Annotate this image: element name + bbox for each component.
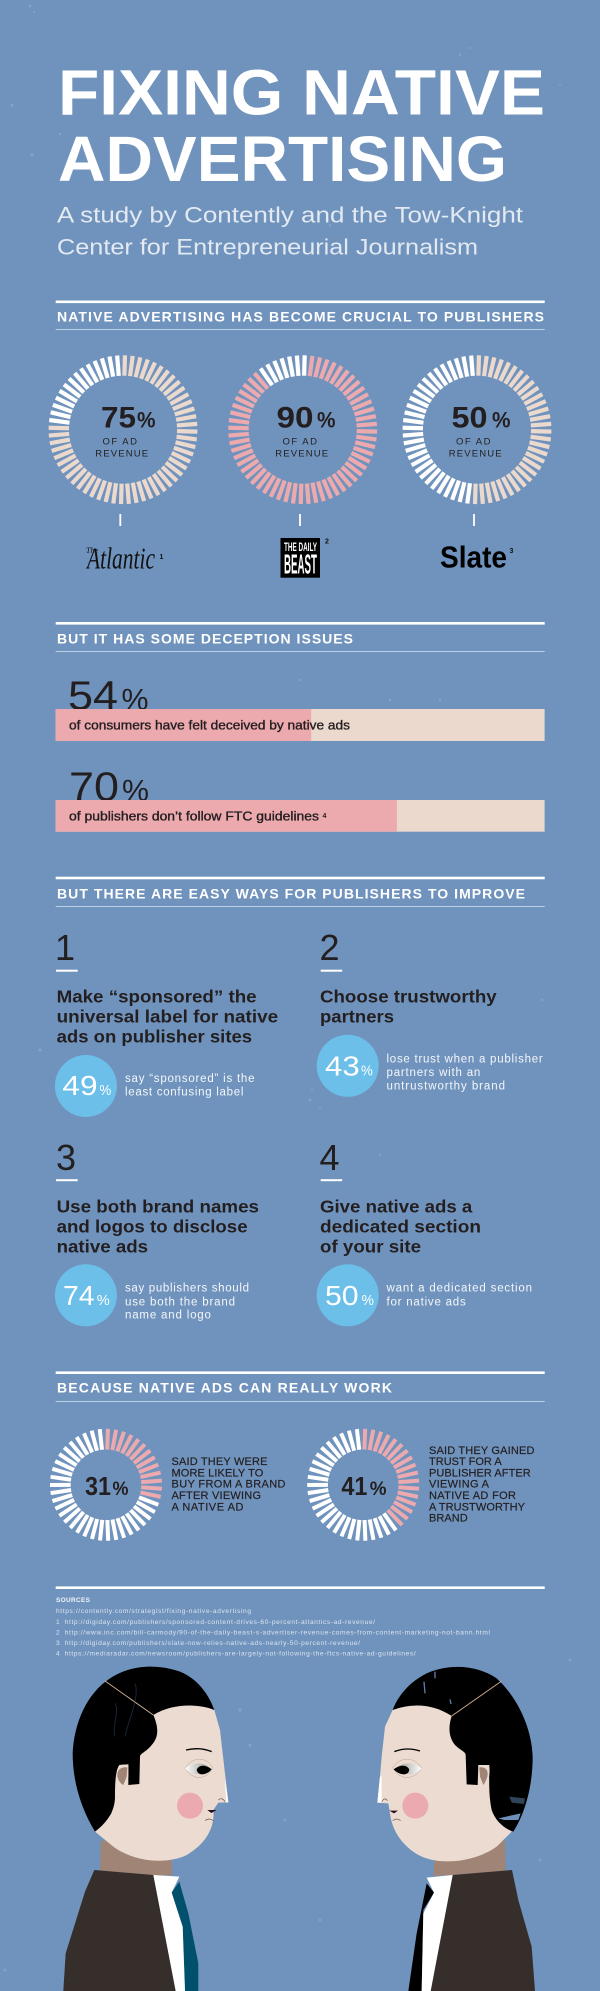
caption: 31%: BUY FROM A BRAND [172, 1479, 286, 1491]
sources: http://digiday.com/publishers/sponsored-content-drives-60-percent-atlantics-ad-revenue/ [65, 1619, 375, 1626]
panel: tip 3 brand names and logos: 3 [56, 1137, 76, 1178]
ring chart: The Atlantic 75%: OF AD [102, 437, 137, 448]
sources: 2 [56, 1629, 60, 1636]
panel: ad revenue rings: BEAST [284, 548, 317, 579]
stat circle: 49%: 49 [62, 1070, 98, 1101]
caption: 31%: MORE LIKELY TO [172, 1467, 264, 1479]
logo: The Atlantic: The [86, 546, 98, 555]
ring chart: The Daily Beast 90%: % [317, 407, 336, 432]
stat circle: 74% [55, 1264, 117, 1326]
ring chart: The Atlantic 75%: % [137, 407, 156, 432]
title: FIXING NATIVE [58, 56, 545, 128]
panel: tip 2 trustworthy partners: partners with an [386, 1067, 480, 1079]
illustration: right man [377, 1667, 535, 1991]
stat bar: 70% of publishers [56, 764, 545, 832]
heading: tip 3 [57, 1196, 259, 1256]
ring chart: The Atlantic 75%: REVENUE [95, 448, 148, 459]
caption: 41%: NATIVE AD FOR [429, 1490, 516, 1502]
stat circle: 50% [317, 1264, 379, 1326]
ring chart: The Atlantic 75% [42, 348, 204, 526]
logo: The Daily Beast: 2 [325, 538, 329, 546]
heading: tip 4: Give native ads a [320, 1196, 473, 1216]
panel: 31% more likely to buy [50, 1429, 286, 1541]
stat circle: 43%: % [361, 1063, 373, 1080]
stat bar: 54% of consumers: % [122, 684, 148, 716]
stat bar: 54% of consumers [56, 672, 545, 741]
panel: tip 2 trustworthy partners: 2 [320, 927, 340, 968]
ring chart: 41% [307, 1429, 419, 1541]
ring chart: The Daily Beast 90%: OF AD [282, 437, 317, 448]
ring chart: Slate 50%: OF AD [456, 437, 491, 448]
heading: tip 2: partners [320, 1007, 394, 1027]
stat bar: 54% of consumers: of consumers have felt deceived by native ads [69, 718, 350, 732]
sources [56, 1586, 545, 1657]
caption: 41%: BRAND [429, 1513, 468, 1525]
section heading: easy ways to improve: BUT THERE ARE EASY WAYS FOR PUBLISHERS TO IMPROVE [57, 885, 525, 901]
panel: 41% gained trust [307, 1429, 534, 1541]
sources: 4 [56, 1650, 60, 1657]
ring chart: The Daily Beast 90% [221, 348, 384, 526]
panel: tip 3 brand names and logos: name and logo [125, 1310, 211, 1322]
stat bar: 54% of consumers: 54 [68, 672, 118, 718]
sources: https://contently.com/strategist/fixing-native-advertising [56, 1608, 251, 1615]
heading: tip 4: dedicated section [320, 1216, 481, 1236]
panel: tip 3 brand names and logos: say publishers should [125, 1282, 249, 1294]
sources: SOURCES [56, 1597, 91, 1604]
panel: tip 1 sponsored label [55, 927, 278, 1117]
heading: tip 3: and logos to disclose [57, 1216, 248, 1236]
caption: 31% [172, 1456, 286, 1513]
panel: tip 3 brand names and logos [55, 1137, 259, 1326]
stat bar: 70% of publishers: 70 [69, 764, 119, 810]
stat circle: 43% [317, 1035, 379, 1097]
heading: tip 1: ads on publisher sites [57, 1027, 252, 1047]
stat circle: 43%: 43 [325, 1051, 360, 1082]
heading: tip 1: Make “sponsored” the [57, 987, 257, 1007]
stat bar: 70% of publishers: 4 [322, 813, 326, 820]
stat circle: 49% [55, 1055, 117, 1117]
logo: The Daily Beast: THE DAILY [284, 540, 317, 554]
panel: tip 1 sponsored label: say “sponsored” is the [125, 1073, 254, 1085]
logo: Slate: Slate [440, 540, 507, 575]
logo: Slate: 3 [510, 548, 514, 555]
sources: http://www.inc.com/bill-carmody/90-of-the-daily-beast-s-advertiser-revenue-comes-from-content-marketing-not-bann.html [65, 1629, 491, 1636]
subtitle: A study by Contently and the Tow-Knight [57, 203, 524, 228]
sources: https://mediaradar.com/newsroom/publishers-are-largely-not-following-the-ftcs-native-ad-guidelines/ [65, 1650, 416, 1657]
caption: 31%: AFTER VIEWING [172, 1490, 261, 1502]
sources: http://digiday.com/publishers/slate-now-relies-native-ads-nearly-50-percent-revenue/ [65, 1640, 360, 1647]
ring chart: 41%: 41 [341, 1471, 367, 1501]
heading: tip 2: Choose trustworthy [320, 987, 497, 1007]
stat circle: 49%: % [100, 1082, 111, 1099]
illustration: left man [63, 1667, 228, 1991]
ring chart: The Daily Beast 90%: 90 [276, 401, 314, 434]
ring chart: Slate 50%: REVENUE [449, 448, 502, 459]
panel: tip 4 dedicated section: want a dedicated section [386, 1282, 532, 1294]
panel: tip 2 trustworthy partners: lose trust when a publisher [386, 1053, 543, 1065]
ring chart: Slate 50%: % [492, 407, 510, 432]
heading: tip 4: of your site [320, 1236, 421, 1256]
ring chart: Slate 50% [396, 348, 558, 526]
panel: tip 2 trustworthy partners: untrustworthy brand [386, 1080, 505, 1092]
caption: 41%: SAID THEY GAINED [429, 1445, 534, 1457]
stat circle: 50%: 50 [325, 1280, 359, 1311]
stat circle: 50%: % [362, 1292, 374, 1309]
logo: The Atlantic: 1 [160, 554, 164, 561]
ring chart: 31%: % [112, 1479, 129, 1500]
caption: 41%: VIEWING A [429, 1479, 490, 1491]
section heading: deception issues: BUT IT HAS SOME DECEPTION ISSUES [57, 630, 353, 646]
ring chart: Slate 50%: 50 [452, 401, 488, 434]
heading: tip 1: universal label for native [57, 1007, 278, 1027]
panel: ad revenue rings [42, 348, 558, 579]
heading: tip 3: Use both brand names [57, 1196, 259, 1216]
title [58, 56, 545, 195]
title: ADVERTISING [58, 123, 507, 195]
sources: 3 [56, 1640, 60, 1647]
ring chart: 41%: % [370, 1479, 387, 1500]
sources: 1 [56, 1619, 60, 1626]
panel: tip 4 dedicated section [317, 1137, 532, 1326]
caption: 41%: TRUST FOR A [429, 1456, 502, 1468]
panel: tip 1 sponsored label: 1 [55, 927, 75, 968]
stat bar: 70% of publishers: of publishers don’t follow FTC guidelines [69, 810, 319, 824]
heading: tip 1 [57, 987, 278, 1047]
section heading: native ads can really work: BECAUSE NATIVE ADS CAN REALLY WORK [57, 1380, 392, 1396]
heading: tip 3: native ads [57, 1236, 148, 1256]
caption: 41%: PUBLISHER AFTER [429, 1467, 531, 1479]
panel: tip 3 brand names and logos: use both the brand [125, 1296, 235, 1308]
logo: The Atlantic: Atlantic [86, 541, 155, 576]
logo: The Daily Beast [280, 538, 329, 579]
panel: deception bars [56, 672, 545, 832]
ring chart: The Daily Beast 90%: REVENUE [275, 448, 328, 459]
stat bar: 70% of publishers: % [122, 774, 149, 808]
caption: 31%: A NATIVE AD [172, 1501, 243, 1513]
panel: tip 4 dedicated section: 4 [320, 1137, 340, 1178]
heading: tip 2 [320, 987, 497, 1027]
subtitle: Center for Entrepreneurial Journalism [57, 234, 478, 259]
caption: 41% [429, 1445, 534, 1525]
section heading: crucial to publishers: NATIVE ADVERTISING HAS BECOME CRUCIAL TO PUBLISHERS [57, 309, 544, 325]
ring chart: 31%: 31 [85, 1471, 111, 1501]
caption: 41%: A TRUSTWORTHY [429, 1501, 526, 1513]
panel: tip 2 trustworthy partners [317, 927, 543, 1097]
ring chart: The Atlantic 75%: 75 [101, 401, 136, 434]
heading: tip 4 [320, 1196, 481, 1256]
panel: tip 4 dedicated section: for native ads [386, 1296, 466, 1308]
stat circle: 74%: 74 [63, 1280, 94, 1311]
caption: 31%: SAID THEY WERE [172, 1456, 268, 1468]
panel: tip 1 sponsored label: least confusing label [125, 1087, 243, 1099]
stat circle: 74%: % [97, 1292, 110, 1309]
subtitle [57, 203, 524, 259]
ring chart: 31% [50, 1429, 162, 1541]
